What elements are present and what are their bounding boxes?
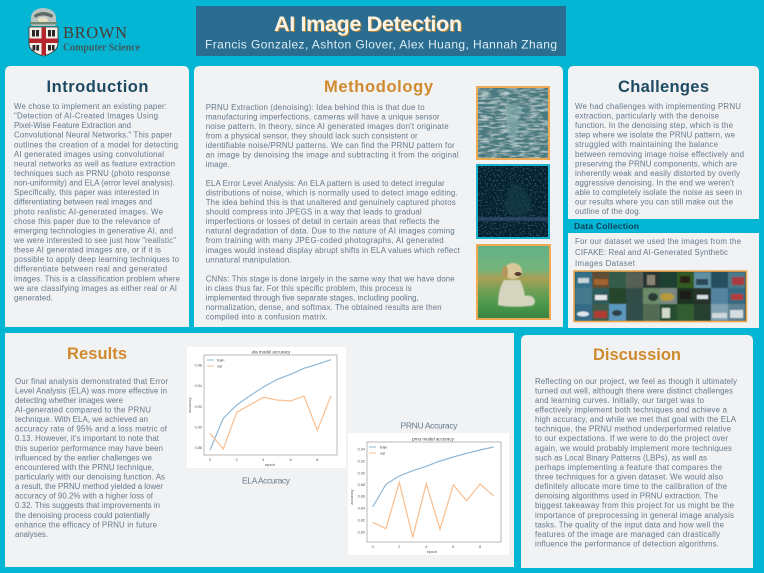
methodology text: compiled into a confusion matrix. xyxy=(206,312,328,322)
methodology text: ELA Error Level Analysis: An ELA pattern is used to detect irregular xyxy=(206,179,445,188)
chart: ELA model accuracy: accuracy xyxy=(188,397,192,413)
title: AI Image Detection xyxy=(274,12,462,36)
discussion text: features of the image are managed can drastically xyxy=(535,530,720,539)
introduction text: these AI generated images are, or if it is xyxy=(14,246,161,255)
introduction text: AI generated images using convolutional xyxy=(14,150,164,159)
discussion text: Reflecting on our project, we feel as though it ultimately xyxy=(535,377,737,386)
chart: PRNU model accuracy: val xyxy=(380,452,385,456)
introduction text: we are classifying images as either real or AI xyxy=(13,284,177,293)
challenges text: inherently weak and easily distorted by overly xyxy=(575,169,740,178)
results text: enhance the efficacy of PRNU in future xyxy=(15,520,158,529)
results text: particularly with our denoising function. As xyxy=(15,472,165,482)
chart: PRNU model accuracy: 0 xyxy=(372,545,374,549)
methodology text: from training with many JPEG-coded photographs, AI generated xyxy=(206,236,444,245)
panel: introduction xyxy=(5,66,189,327)
methodology text: The idea behind this is that unaltered and genuinely captured photos xyxy=(206,198,456,207)
methodology text: from a physical sensor, they should lack such consistent or xyxy=(206,131,418,140)
challenges text: function. In the denoising step, which is the xyxy=(575,121,734,130)
chart: ELA model accuracy: 8 xyxy=(316,458,318,462)
chart: ELA model accuracy: 4 xyxy=(262,458,264,462)
caption: PRNU accuracy: PRNU Accuracy xyxy=(400,420,458,430)
introduction text: differentiate between real and generated xyxy=(14,265,167,274)
data collection text: Images Dataset xyxy=(575,259,636,268)
caption: ELA accuracy: ELA Accuracy xyxy=(242,476,291,486)
introduction text: techniques such as PRNU (photo response xyxy=(14,169,171,178)
introduction text: Convolutional Neural Networks." This paper xyxy=(14,131,172,140)
chart: ELA model accuracy: 6 xyxy=(290,458,292,462)
heading: introduction: Introduction xyxy=(46,78,148,96)
methodology text: identifiable noise/PRNU patterns. We can find the PRNU pattern for xyxy=(206,141,455,150)
image: puppy photo xyxy=(477,245,550,319)
methodology text: normalization, dense, and softmax. The obtained results are then xyxy=(206,303,442,312)
results text: the denoising process could potentially xyxy=(15,511,150,520)
discussion text: three techniques for a given dataset. We would also xyxy=(535,472,724,482)
methodology text: images would instead display abrupt shifts in ELA values which reflect xyxy=(206,246,460,255)
methodology text: should compress into JPEGS in a way that leads to gradual xyxy=(206,208,422,217)
logo: Brown Computer Science xyxy=(29,8,141,56)
heading: challenges: Challenges xyxy=(618,78,709,96)
discussion text: such as Local Binary Patterns (LBPs), as well as xyxy=(535,453,707,462)
chart: ELA model accuracy: epoch xyxy=(265,463,275,467)
panel: data collection xyxy=(568,233,759,328)
discussion text: again, we would probably implement more techniques xyxy=(535,444,732,453)
results text: detecting whether images were xyxy=(15,396,124,405)
chart: PRNU model accuracy: 4 xyxy=(425,545,427,549)
discussion text: denoising algorithms used in PRNU extraction. The xyxy=(535,492,719,501)
challenges text: extraction, particularly with the denoise xyxy=(575,112,720,121)
chart: ELA model accuracy: ela model accuracy xyxy=(252,350,291,354)
results text: technique. With ELA, we achieved an xyxy=(15,415,148,424)
title: AI Image Detection xyxy=(275,13,463,37)
data collection text: CIFAKE: Real and AI-Generated Synthetic xyxy=(575,248,728,257)
chart: PRNU model accuracy: 0.88 xyxy=(358,483,365,487)
results text: AI-generated compared to the PRNU xyxy=(15,406,151,414)
image: ELA map xyxy=(477,165,549,238)
methodology text: implemented through five separate stages, including pooling, xyxy=(206,293,419,302)
introduction text: non-uniformity) and ELA (error level analysis). xyxy=(14,179,175,188)
chart: ELA model accuracy: 0.88 xyxy=(195,446,202,450)
chart: ELA model accuracy xyxy=(187,347,346,468)
introduction text: "Detection of AI-Created Images Using xyxy=(14,112,158,121)
data collection text: For our dataset we used the images from the xyxy=(575,237,742,246)
chart: PRNU model accuracy xyxy=(348,433,509,555)
methodology text: unnatural manipulation. xyxy=(206,255,292,264)
introduction text: images. This is a classification problem where xyxy=(14,274,181,283)
icon: Brown crest xyxy=(29,8,58,56)
methodology text: manufacturing imperfections, cameras will have a unique sensor xyxy=(206,112,440,121)
data collection text xyxy=(575,237,742,268)
chart: PRNU model accuracy: 0.92 xyxy=(358,459,365,463)
methodology text: image. xyxy=(206,160,230,169)
title banner xyxy=(196,6,566,56)
introduction text: we were interested to see just how "realistic" xyxy=(13,236,176,245)
discussion text: to our expectations. If we were to do the project over xyxy=(535,434,728,443)
methodology text: imperfections or losses of detail in certain areas that reflects the xyxy=(206,217,440,226)
chart: PRNU model accuracy: 0.84 xyxy=(358,507,365,511)
introduction text: outlines the creation of a model for detecting xyxy=(14,140,178,149)
wordmark: BROWN xyxy=(63,23,127,42)
challenges text: preserving the PRNU components, which are xyxy=(575,159,738,168)
chart: ELA model accuracy: train xyxy=(217,358,224,362)
results text: 0.32. This suggests that improvements in xyxy=(15,501,160,510)
discussion text: tasks. The quality of the input data and how well the xyxy=(535,520,725,529)
results text: encountered with the PRNU technique, xyxy=(15,463,154,472)
chart: PRNU model accuracy: prnu model accuracy xyxy=(412,436,455,442)
methodology text: an image by denoising the image and subtracting it from the original xyxy=(206,150,459,160)
methodology text: noise pattern. In theory, since AI generated images don't originate xyxy=(206,122,449,131)
chart: PRNU model accuracy: 0.90 xyxy=(358,471,365,475)
discussion text: perhaps implementing a feature that compares the xyxy=(535,463,723,472)
chart: ELA model accuracy: 0.92 xyxy=(195,405,202,409)
wordmark: Computer Science xyxy=(63,42,141,54)
results text: 0.13. However, it's important to note that xyxy=(15,434,160,443)
introduction text: We chose to implement an existing paper: xyxy=(14,102,167,111)
panel: methodology xyxy=(194,66,563,327)
results text: influenced by the earlier challenges we xyxy=(15,453,153,462)
discussion text: high accuracy, and while we met that goal with the ELA xyxy=(535,415,737,424)
image: CIFAKE sample grid xyxy=(574,271,746,322)
chart: PRNU model accuracy: 0.94 xyxy=(358,448,365,452)
results text: a result, the PRNU method yielded a lower xyxy=(15,482,163,491)
discussion text xyxy=(535,377,737,548)
challenges text: able to completely isolate the noise as seen in xyxy=(575,188,742,197)
chart: PRNU model accuracy: train xyxy=(380,446,387,450)
heading: results: Results xyxy=(67,345,127,363)
chart: PRNU model accuracy: 0.82 xyxy=(358,518,365,522)
methodology text: CNNs: This stage is done largely in the same way that we have done xyxy=(206,274,455,283)
introduction text: neural networks as well as feature extraction xyxy=(14,159,175,168)
challenges text xyxy=(575,102,744,216)
results text xyxy=(15,377,168,539)
chart: PRNU model accuracy: 8 xyxy=(479,545,481,549)
introduction text: emerging technologies in generative AI, and xyxy=(14,226,173,235)
discussion text: importance of preprocessing in general image analysis xyxy=(535,511,734,520)
chart: ELA model accuracy: 2 xyxy=(236,458,238,462)
challenges text: outline of the dog. xyxy=(575,207,641,216)
methodology text xyxy=(206,103,460,322)
discussion text: turned out well, although there were distinct challenges xyxy=(535,386,733,395)
challenges text: We had challenges with implementing PRNU xyxy=(575,102,741,111)
results text: Level Analysis (ELA) was more effective in xyxy=(15,386,167,395)
challenges text: step where we isolate the PRNU pattern, we xyxy=(575,131,736,140)
challenges text: our results where you can still make out the xyxy=(575,198,734,206)
results text: accuracy of 90.2% with a higher loss of xyxy=(15,492,154,501)
challenges text: aggressive denoising. In the end we weren't xyxy=(575,178,735,187)
methodology text: natural degradation of data. Due to the nature of AI images coming xyxy=(206,227,455,236)
chart: PRNU model accuracy: 6 xyxy=(452,545,454,549)
introduction text: Pixel-Wise Feature Extraction and xyxy=(14,121,131,130)
introduction text: photo realistic AI-generated images. We xyxy=(14,207,164,216)
results text: Our final analysis demonstrated that Error xyxy=(15,377,168,386)
methodology text: PRNU Extraction (denoising): Idea behind this is that due to xyxy=(206,103,425,112)
wordmark xyxy=(63,23,141,54)
panel: results xyxy=(5,333,514,567)
methodology text: distributions of noise, which is normally used to detect image editing. xyxy=(206,189,458,198)
introduction text: Specifically, this paper was interested in xyxy=(14,188,159,197)
discussion text: technique, the PRNU method underperformed relative xyxy=(535,425,732,434)
discussion text: definitely allocate more time to the calibration of the xyxy=(535,482,728,491)
discussion text: influence the performance of detection algorithms. xyxy=(535,540,719,548)
chart: ELA model accuracy: 0 xyxy=(209,458,211,462)
chart: PRNU model accuracy: accuracy xyxy=(350,489,354,505)
introduction text: chose this paper due to the relevance of xyxy=(14,217,161,226)
introduction text: possible to apply deep learning techniques to xyxy=(14,255,180,264)
panel: challenges xyxy=(568,66,759,219)
chart: ELA model accuracy: val xyxy=(217,364,222,368)
chart: PRNU model accuracy: 2 xyxy=(398,545,400,549)
discussion text: effectively implement both techniques and achieve a xyxy=(535,406,728,414)
challenges text: between removing image noise effectively and xyxy=(575,150,744,159)
introduction text xyxy=(13,102,181,302)
results text: analyses. xyxy=(15,530,48,539)
chart: PRNU model accuracy: 0.80 xyxy=(358,530,365,534)
methodology text: in class thus far. For this specific problem, this process is xyxy=(206,284,412,293)
chart: ELA model accuracy: 0.90 xyxy=(195,426,202,430)
chart: PRNU model accuracy: epoch xyxy=(427,550,437,554)
image: PRNU noise residual xyxy=(477,87,549,159)
heading: methodology: Methodology xyxy=(324,78,434,96)
results text: this superior performance may have been xyxy=(15,444,163,453)
introduction text: generated. xyxy=(14,293,53,302)
discussion text: biggest takeaway from this project for us might be the xyxy=(535,501,735,510)
introduction text: differentiating between real images and xyxy=(14,198,152,207)
challenges text: struggled with maintaining the balance xyxy=(575,140,719,149)
chart: ELA model accuracy: 0.96 xyxy=(195,364,202,368)
panel: discussion xyxy=(521,335,753,568)
chart: ELA model accuracy: 0.94 xyxy=(195,384,202,388)
discussion text: and learning curves. Initially, our target was to xyxy=(535,396,705,405)
heading: discussion: Discussion xyxy=(593,346,681,364)
chart: PRNU model accuracy: 0.86 xyxy=(358,495,365,499)
authors: Francis Gonzalez, Ashton Glover, Alex Huang, Hannah Zhang xyxy=(205,38,557,52)
heading: data collection: Data Collection xyxy=(574,221,639,231)
results text: accuracy rate of 95% and a loss metric of xyxy=(15,425,168,434)
